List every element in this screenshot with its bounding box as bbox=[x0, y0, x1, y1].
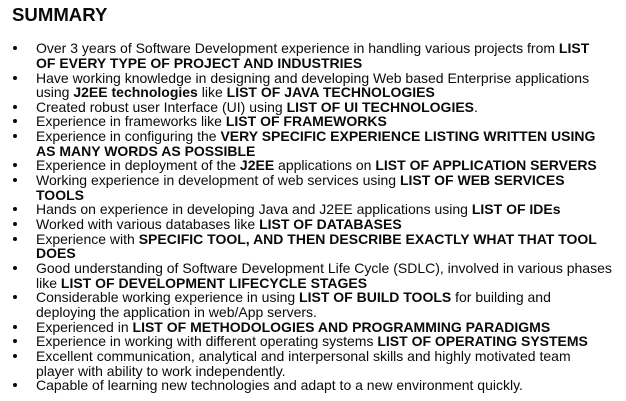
bullet: SDLC: like LIST OF DEVELOPMENT LIFECYCLE STAGES bbox=[36, 275, 367, 291]
bullet: SDLC: Good understanding of Software Development Life Cycle (SDLC), involved in various phases bbox=[36, 260, 612, 276]
title: SUMMARY bbox=[12, 4, 107, 25]
bullet: web services: Working experience in development of web services using LIST OF WEB SERVICES bbox=[36, 172, 565, 188]
bullet: specific experience bbox=[12, 129, 612, 158]
bullet: soft skills: Excellent communication, analytical and interpersonal skills and highly motivated team bbox=[36, 348, 571, 364]
bullet: adaptability: Capable of learning new technologies and adapt to a new environment quickly. bbox=[36, 377, 523, 393]
bullet: build tools: deploying the application in web/App servers. bbox=[36, 304, 317, 320]
bullet: methodologies: Experienced in LIST OF METHODOLOGIES AND PROGRAMMING PARADIGMS bbox=[36, 319, 550, 335]
bullet: web application knowledge: using J2EE technologies like LIST OF JAVA TECHNOLOGIES bbox=[36, 84, 435, 100]
bullet: specific experience: AS MANY WORDS AS POSSIBLE bbox=[36, 143, 255, 159]
bullet: SDLC bbox=[12, 261, 612, 290]
bullet: project experience: Over 3 years of Software Development experience in handling various projects from LIST bbox=[36, 40, 589, 56]
bullet: soft skills: player with ability to work independently. bbox=[36, 363, 286, 379]
bullet: web services bbox=[12, 173, 612, 202]
bullet: frameworks: Experience in frameworks like LIST OF FRAMEWORKS bbox=[36, 113, 387, 129]
bullet: soft skills bbox=[12, 349, 612, 378]
bullet: databases: Worked with various databases like LIST OF DATABASES bbox=[36, 216, 402, 232]
bullet: build tools bbox=[12, 290, 612, 320]
bullet: operating systems: Experience in working with different operating systems LIST OF OPERATING SYSTEMS bbox=[36, 333, 588, 349]
bullet: specific tool bbox=[12, 232, 612, 261]
bullet: specific tool: Experience with SPECIFIC TOOL, AND THEN DESCRIBE EXACTLY WHAT THAT TOOL bbox=[36, 231, 597, 247]
bullet: project experience: OF EVERY TYPE OF PROJECT AND INDUSTRIES bbox=[36, 55, 362, 71]
bullet: web services: TOOLS bbox=[36, 187, 84, 203]
bullet: specific tool: DOES bbox=[36, 245, 76, 261]
bullet: IDEs: Hands on experience in developing Java and J2EE applications using LIST OF IDEs bbox=[36, 201, 561, 217]
bullet: build tools: Considerable working experience in using LIST OF BUILD TOOLS for building and bbox=[36, 289, 551, 305]
bullet: web application knowledge bbox=[12, 70, 612, 100]
bullet: web application knowledge: Have working knowledge in designing and developing Web based Enterprise applications bbox=[36, 70, 589, 86]
bullet: application servers: Experience in deployment of the J2EE applications on LIST OF APPLICATION SERVERS bbox=[36, 157, 597, 173]
bullet: project experience bbox=[12, 41, 612, 70]
bullet: user interface: Created robust user Interface (UI) using LIST OF UI TECHNOLOGIES. bbox=[36, 99, 478, 115]
bullet: specific experience: Experience in configuring the VERY SPECIFIC EXPERIENCE LISTING WRITTEN USING bbox=[36, 128, 595, 144]
